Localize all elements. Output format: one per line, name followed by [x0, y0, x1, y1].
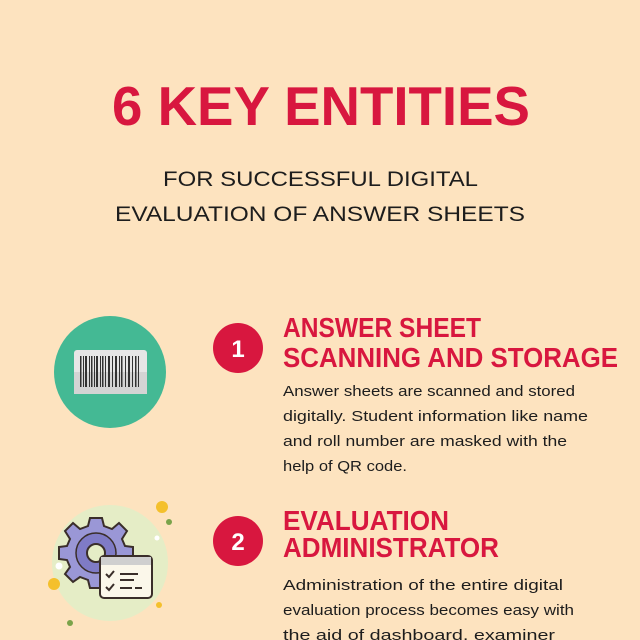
icon: barcode [54, 316, 166, 428]
heading 2: ADMINISTRATOR [283, 532, 499, 563]
heading 1 [283, 312, 618, 373]
body 2 [283, 577, 574, 640]
heading 2: EVALUATION [283, 505, 449, 536]
body 1 [283, 383, 588, 475]
title: 6 KEY ENTITIES [112, 75, 530, 137]
body 2: evaluation process becomes easy with [283, 602, 574, 619]
body 1: digitally. Student information like name [283, 408, 588, 425]
number badge 1: 1 [231, 336, 245, 363]
body 1: Answer sheets are scanned and stored [283, 383, 575, 400]
heading 1: SCANNING AND STORAGE [283, 342, 618, 373]
icon: gear with checklist [48, 501, 172, 626]
heading 2 [283, 505, 499, 563]
body 1: and roll number are masked with the [283, 433, 567, 450]
body 2: Administration of the entire digital [283, 577, 563, 594]
subtitle: EVALUATION OF ANSWER SHEETS [115, 203, 525, 226]
body 1: help of QR code. [283, 458, 407, 475]
number badge 1 [213, 323, 263, 373]
number badge 2 [213, 516, 263, 566]
number badge 2: 2 [231, 529, 245, 556]
heading 1: ANSWER SHEET [283, 312, 481, 343]
subtitle [115, 168, 525, 226]
subtitle: FOR SUCCESSFUL DIGITAL [163, 168, 478, 191]
